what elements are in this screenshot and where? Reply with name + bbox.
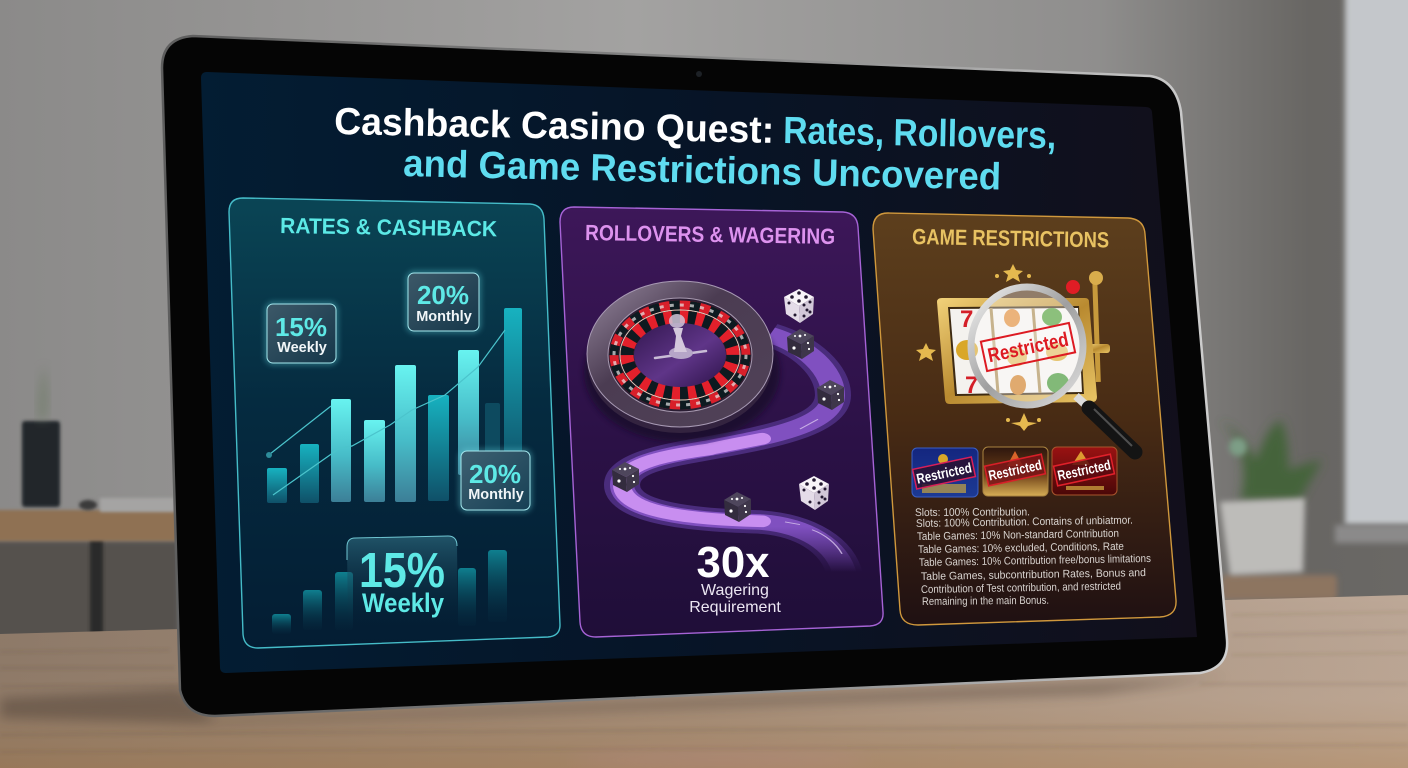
wagering requirement text: [689, 538, 781, 616]
symbols: reels: [960, 306, 978, 399]
restricted stamp: Restricted: [986, 329, 1071, 367]
badge: 20% monthly top: 20%: [417, 280, 469, 310]
roulette wheel: [584, 281, 780, 442]
title: Rates, Rollovers,: [783, 110, 1057, 157]
thumbnail: restricted game red: Restricted: [1056, 457, 1112, 483]
text block: contribution rules: Table Games: 10% Contribution free/bonus limitations: [919, 553, 1151, 569]
webcam: [696, 71, 702, 77]
tablet reflection: [570, 751, 870, 768]
thumbnail: restricted game gold: [983, 447, 1048, 496]
text block: contribution rules: Slots: 100% Contribution. Contains of unbiatmor.: [916, 515, 1133, 530]
icon: stars: [916, 264, 1041, 431]
symbols: reels: 7: [960, 306, 973, 333]
symbols: reels: 7: [965, 372, 978, 399]
text block: contribution rules: Remaining in the main Bonus.: [922, 595, 1049, 608]
badge: 20% monthly top: [408, 273, 479, 331]
bar chart: main: [266, 308, 522, 503]
text block: contribution rules: Table Games: 10% excluded, Conditions, Rate: [918, 541, 1124, 556]
text block: contribution rules: Contribution of Test contribution, and restricted: [921, 581, 1121, 596]
text block: contribution rules: Table Games, subcontribution Rates, Bonus and: [921, 567, 1146, 583]
roulette pocket ring: [627, 317, 733, 393]
icon: dark die 4: [724, 492, 751, 522]
background: right plant and pot: [1218, 420, 1337, 600]
panel: rollovers and wagering: [560, 207, 883, 637]
title: Cashback Casino Quest:: [334, 101, 775, 152]
icon: white die lower: [799, 476, 829, 510]
thumbnail: restricted game blue: [912, 448, 978, 497]
slot machine: [937, 271, 1110, 404]
screen: [201, 72, 1197, 673]
callout: 15% weekly large: 15%: [359, 544, 445, 598]
tablet shadow on table: [0, 676, 1230, 724]
callout: 15% weekly large: [347, 536, 458, 628]
roulette number ring: [614, 305, 746, 405]
text block: contribution rules: [915, 506, 1151, 608]
wagering requirement text: Wagering: [701, 582, 769, 599]
dice: [612, 289, 844, 522]
bar chart: lower faded: [272, 550, 507, 634]
badge: 20% monthly top: Monthly: [416, 309, 472, 325]
magnifying glass: [971, 287, 1135, 452]
callout: 15% weekly large: Weekly: [362, 588, 444, 618]
background: left shelf with vase: [0, 365, 180, 640]
thumbnail: restricted game blue: Restricted: [915, 459, 973, 487]
heading: game restrictions: GAME RESTRICTIONS: [912, 224, 1109, 252]
badge: 20% monthly bottom: [461, 451, 530, 510]
text block: contribution rules: Table Games: 10% Non-standard Contribution: [917, 528, 1119, 543]
badge: 15% weekly: [267, 304, 336, 363]
table: [0, 595, 1408, 768]
heading: rollovers and wagering: ROLLOVERS & WAGERING: [585, 220, 835, 249]
title: [334, 101, 1057, 199]
road: winding wagering track: [622, 335, 845, 575]
heading: rates and cashback: RATES & CASHBACK: [280, 213, 497, 241]
badge: 20% monthly bottom: 20%: [469, 459, 521, 489]
roulette hub: [634, 323, 726, 387]
title: and Game Restrictions Uncovered: [403, 143, 1002, 199]
badge: 15% weekly: 15%: [275, 312, 327, 342]
panel: game restrictions: [873, 213, 1176, 625]
window sill: [1335, 525, 1408, 543]
wagering requirement text: 30x: [696, 538, 770, 587]
icon: dark die 2: [817, 380, 844, 410]
badge: 20% monthly bottom: Monthly: [468, 487, 524, 503]
text block: contribution rules: Slots: 100% Contribution.: [915, 506, 1030, 519]
icon: white die upper: [784, 289, 814, 323]
icon: dark die 3: [612, 462, 639, 492]
icon: dark die 1: [787, 329, 814, 359]
tablet body: [162, 36, 1227, 716]
thumbnail: restricted game gold: Restricted: [987, 457, 1043, 483]
window: [1345, 0, 1408, 525]
panel: rates and cashback: [229, 198, 560, 648]
thumbnail: restricted game red: [1052, 447, 1117, 495]
badge: 15% weekly: Weekly: [277, 340, 327, 356]
wagering requirement text: Requirement: [689, 599, 781, 616]
